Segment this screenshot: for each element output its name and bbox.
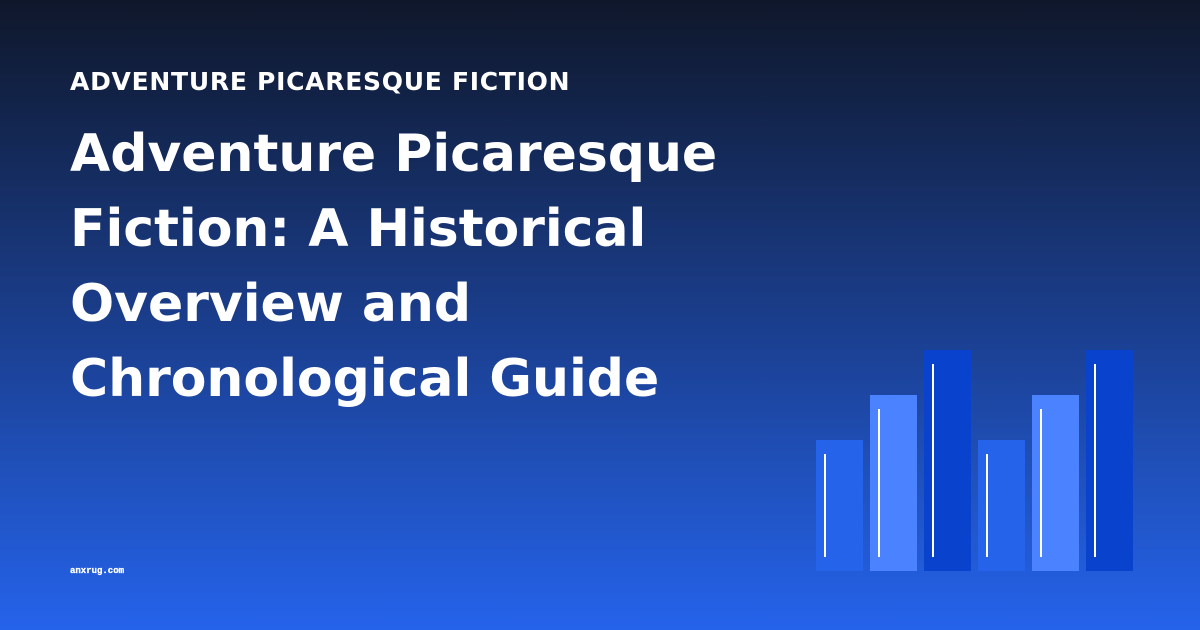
bar 2 — [870, 395, 917, 571]
main title: Adventure Picaresque — [70, 124, 717, 184]
eyebrow heading: ADVENTURE PICARESQUE FICTION — [70, 67, 570, 96]
bar 1 — [816, 440, 863, 571]
main title — [70, 124, 717, 409]
bar 6 — [1086, 350, 1133, 571]
main title: Overview and — [70, 274, 471, 334]
bar 3 — [924, 350, 971, 571]
main title: Fiction: A Historical — [70, 199, 646, 259]
bar 4 — [978, 440, 1025, 571]
footer domain: anxrug.com — [70, 566, 124, 576]
main title: Chronological Guide — [70, 349, 659, 409]
bar 5 — [1032, 395, 1079, 571]
